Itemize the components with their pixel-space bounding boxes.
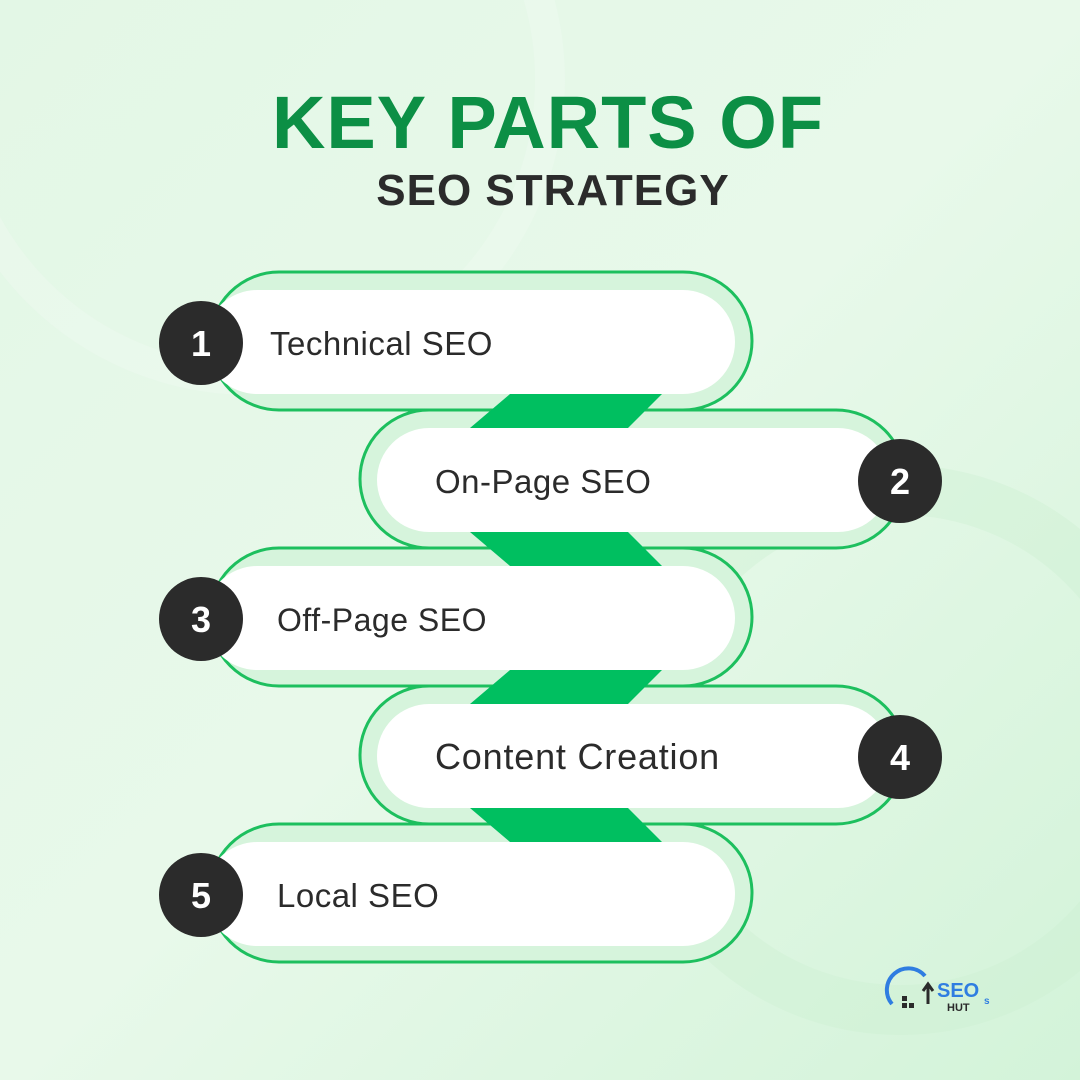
- title: [272, 81, 824, 215]
- item 2: On-Page SEO: 2: [890, 461, 910, 502]
- item 3: Off-Page SEO: [159, 566, 735, 670]
- item 2: On-Page SEO: [377, 428, 942, 532]
- connectors: [470, 394, 662, 842]
- item 4: Content Creation: Content Creation: [435, 736, 720, 777]
- item 5: Local SEO: Local SEO: [277, 877, 439, 914]
- outline frame: [210, 272, 905, 962]
- logo: SEO HUT: s: [984, 996, 990, 1007]
- item 5: Local SEO: [159, 842, 735, 946]
- item 4: Content Creation: [377, 704, 942, 808]
- item 4: Content Creation: 4: [890, 737, 910, 778]
- item 1: Technical SEO: [159, 290, 735, 394]
- title: SEO STRATEGY: [376, 166, 730, 215]
- title: KEY PARTS OF: [272, 81, 824, 164]
- item 3: Off-Page SEO: 3: [191, 599, 211, 640]
- logo: SEO HUT: [887, 968, 990, 1014]
- item 1: Technical SEO: Technical SEO: [270, 325, 493, 362]
- item 5: Local SEO: 5: [191, 875, 211, 916]
- item 3: Off-Page SEO: Off-Page SEO: [277, 602, 487, 638]
- logo: SEO HUT: HUT: [947, 1002, 970, 1014]
- logo: SEO HUT: SEO: [937, 980, 979, 1002]
- item 1: Technical SEO: 1: [191, 323, 211, 364]
- item 2: On-Page SEO: On-Page SEO: [435, 463, 651, 500]
